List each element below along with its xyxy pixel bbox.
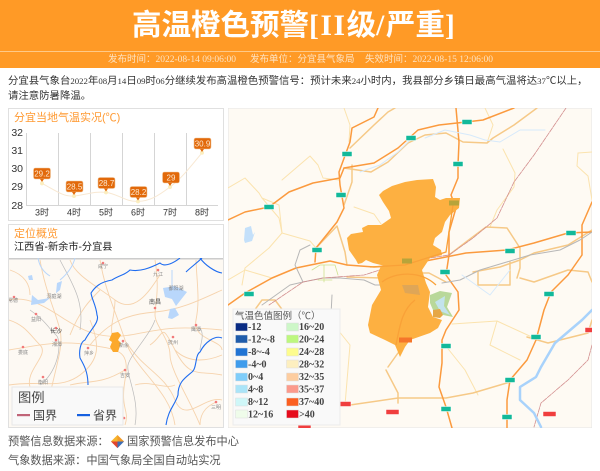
line chart: 28.7 [99, 179, 115, 188]
lake [430, 291, 453, 317]
source: weather data: 气象数据来源：中国气象局全国自动站实况 [8, 454, 221, 466]
source: warning data: 预警信息数据来源： [8, 436, 109, 448]
legend: temperature colours: -4~0 [248, 360, 267, 370]
legend: temperature colours: 气温色值图例（℃） [235, 310, 321, 322]
overview map: 新余 [119, 342, 129, 349]
map legend [12, 387, 123, 425]
overview map: 吉安 [120, 372, 130, 379]
overview map [9, 258, 223, 427]
issue metadata: 发布时间：2022-08-14 09:06:00 [108, 55, 236, 65]
source: warning data [8, 435, 239, 448]
overview map: 萍乡 [84, 350, 94, 357]
legend: temperature colours: -12~-8 [248, 334, 275, 346]
line chart: 29 [11, 181, 23, 193]
legend: temperature colours: 12~16 [248, 410, 273, 420]
legend: temperature colours: 20~24 [299, 334, 324, 346]
legend: temperature colours: 4~8 [248, 384, 263, 396]
line chart: 8时 [195, 206, 209, 218]
header banner [0, 0, 600, 68]
title: 高温橙色预警[II级/严重] [132, 10, 456, 42]
legend: temperature colours: -8~-4 [248, 347, 270, 358]
warning text: 分宜县气象台2022年08月14日09时06分继续发布高温橙色预警信号：预计未来24小时内，我县部分乡镇日最高气温将达37℃以上， [8, 76, 588, 87]
legend: temperature colours [233, 309, 340, 425]
line chart: 4时 [67, 206, 81, 218]
overview map: 三明 [211, 405, 221, 411]
line chart: 28.5 [67, 182, 83, 192]
chart heading: 分宜当地气温实况(℃) [14, 112, 120, 124]
issue metadata: 发布单位：分宜县气象局 [250, 55, 355, 65]
legend: temperature colours: -12 [248, 322, 261, 333]
line chart: 31 [11, 145, 23, 157]
map legend: 国界 [33, 408, 57, 422]
line chart: 5时 [99, 206, 113, 218]
legend: temperature colours: 8~12 [248, 397, 268, 408]
overview map: 九江 [153, 271, 163, 278]
overview map: 咸宁 [98, 263, 108, 270]
overview map: 益阳 [31, 316, 41, 323]
legend: temperature colours: 0~4 [248, 372, 263, 383]
map legend: 省界 [93, 408, 117, 422]
legend: temperature colours: 32~35 [299, 372, 324, 383]
overview map: 长沙 [50, 327, 62, 335]
overview map: 鹰潭 [191, 326, 201, 333]
highway shields [244, 120, 576, 420]
line chart: 30.9 [195, 140, 211, 148]
panel: temperature chart [8, 108, 224, 221]
line chart: 30 [11, 163, 23, 175]
line chart: 6时 [131, 206, 145, 218]
overview map: 衡阳 [38, 379, 48, 386]
line chart: 28.2 [131, 188, 147, 197]
line chart: 3时 [35, 206, 49, 218]
warning text: 请注意防暑降温。 [8, 90, 91, 102]
line chart [11, 127, 218, 218]
legend: temperature colours: 16~20 [299, 322, 324, 333]
location name: 江西省-新余市-分宜县 [14, 242, 112, 253]
legend: temperature colours: 24~28 [299, 347, 324, 358]
overview map: 洞庭湖 [46, 293, 62, 300]
overview map: 抚州 [168, 339, 178, 346]
legend: temperature colours: 37~40 [299, 397, 324, 408]
warning area: Fenyi county [347, 179, 460, 357]
warning text [8, 75, 588, 102]
line chart: 32 [11, 127, 23, 139]
legend: temperature colours: 35~37 [299, 384, 324, 396]
line chart: 28 [11, 200, 23, 212]
overview map: 湘潭 [52, 341, 62, 348]
location highlight [109, 332, 121, 352]
header divider [0, 51, 600, 52]
icon: warning centre logo [111, 435, 124, 448]
issue metadata: 失效时间：2022-08-15 12:06:00 [365, 55, 493, 65]
source: warning data: 国家预警信息发布中心 [127, 436, 239, 448]
overview map: 南昌 [149, 298, 161, 306]
overview map: 娄底 [18, 349, 28, 356]
line chart: 29.2 [34, 170, 50, 178]
panel: location overview [8, 224, 224, 428]
legend: temperature colours: >40 [299, 410, 315, 420]
line chart: 29 [167, 174, 176, 182]
issue metadata [108, 54, 493, 65]
panel: main map [228, 108, 592, 428]
overview map: 鄱阳湖 [168, 285, 184, 292]
map legend: 图例 [18, 390, 45, 405]
location heading: 定位概览 [14, 228, 58, 240]
line chart: 7时 [163, 206, 177, 218]
legend: temperature colours: 28~32 [299, 360, 324, 370]
